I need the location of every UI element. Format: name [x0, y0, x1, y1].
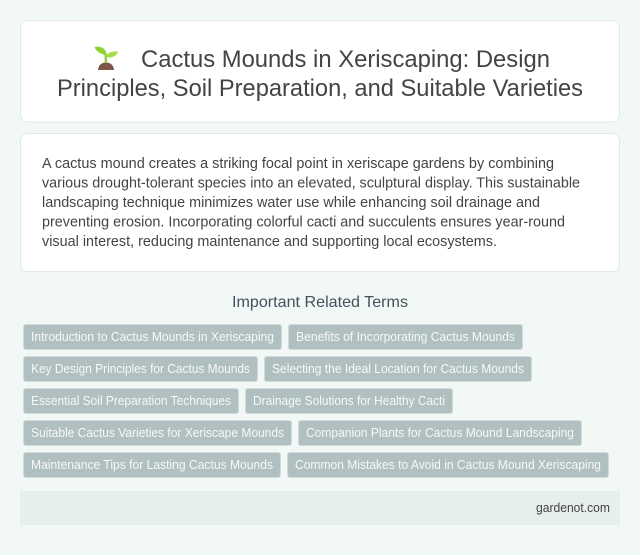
description text: visual interest, reducing maintenance and supporting local ecosystems.: [42, 234, 497, 250]
tag: Introduction to Cactus Mounds in Xeriscaping: [31, 330, 274, 344]
description text: various drought-tolerant species into an elevated, sculptural display. This sustainable: [42, 176, 580, 192]
tag: [288, 452, 608, 478]
related terms tags: [24, 324, 608, 478]
description text: landscaping technique minimizes water use while enhancing soil drainage and: [42, 195, 540, 211]
tag: Drainage Solutions for Healthy Cacti: [253, 394, 445, 408]
tag: Essential Soil Preparation Techniques: [31, 394, 231, 408]
header panel: [20, 20, 620, 122]
tag: Maintenance Tips for Lasting Cactus Mounds: [31, 458, 273, 472]
panel: description: [20, 134, 620, 272]
tag: Selecting the Ideal Location for Cactus Mounds: [272, 362, 524, 376]
footer source: gardenot.com: [536, 501, 610, 515]
tag: [298, 420, 582, 446]
description text: A cactus mound creates a striking focal point in xeriscape gardens by combining: [42, 156, 554, 172]
tag: Suitable Cactus Varieties for Xeriscape Mounds: [31, 426, 284, 440]
tag: Common Mistakes to Avoid in Cactus Mound Xeriscaping: [295, 458, 601, 472]
tag: [246, 388, 452, 414]
tag: [24, 324, 282, 350]
title: Principles, Soil Preparation, and Suitable Varieties: [57, 75, 583, 102]
tag: [24, 388, 238, 414]
description text: preventing erosion. Incorporating colorful cacti and succulents ensures year-round: [42, 214, 565, 230]
tag: [288, 324, 522, 350]
tag: [24, 420, 292, 446]
tag: [264, 356, 532, 382]
tag: Companion Plants for Cactus Mound Landscaping: [306, 426, 574, 440]
heading: related terms: Important Related Terms: [232, 294, 408, 311]
description text: [42, 156, 580, 250]
tag: Key Design Principles for Cactus Mounds: [31, 362, 250, 376]
title: Cactus Mounds in Xeriscaping: Design: [141, 46, 550, 73]
tag: [24, 452, 280, 478]
footer: [20, 491, 620, 525]
tag: Benefits of Incorporating Cactus Mounds: [296, 330, 515, 344]
title: [57, 46, 583, 102]
tag: [24, 356, 258, 382]
icon: seedling: [94, 47, 118, 70]
